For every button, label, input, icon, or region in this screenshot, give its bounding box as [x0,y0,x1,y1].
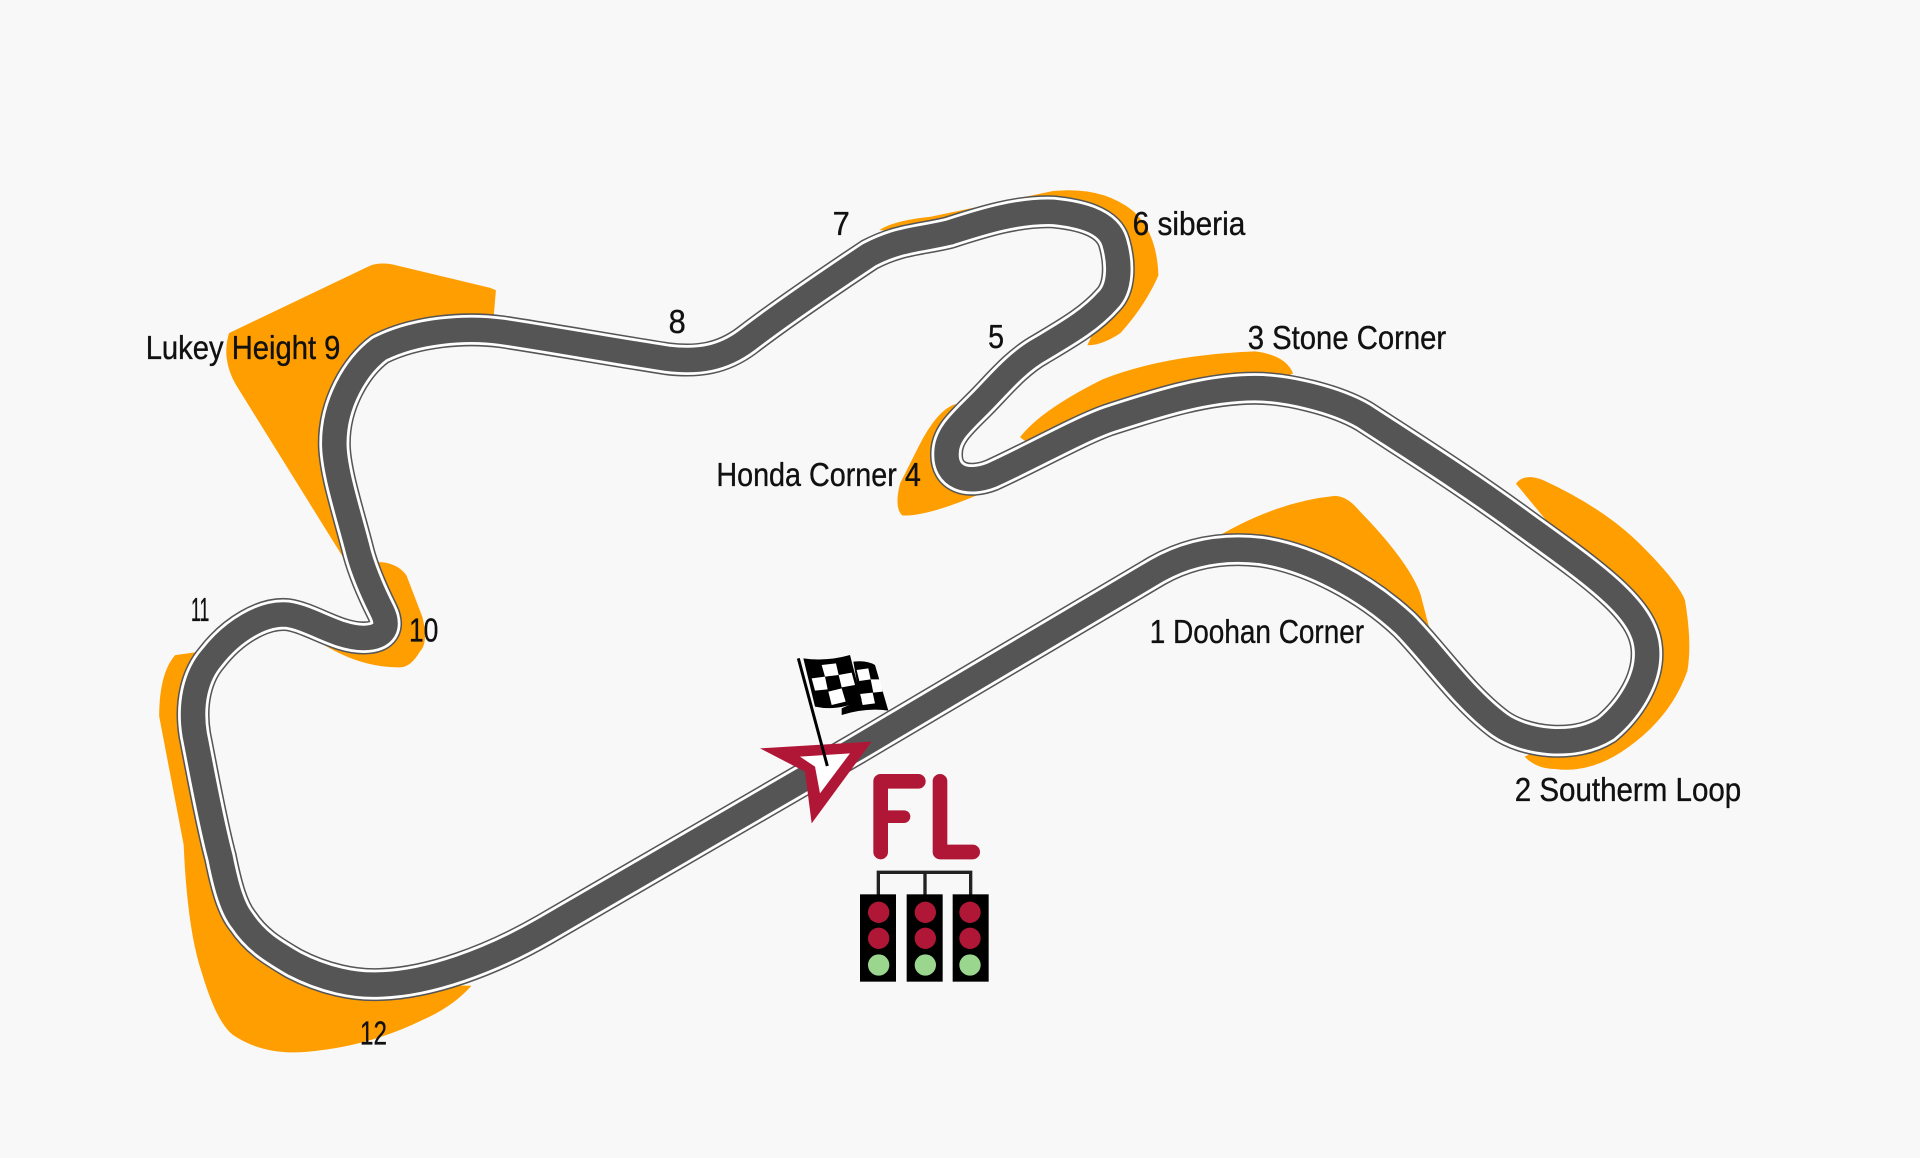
corner labels [146,206,1741,1052]
run-off: turns 11 and 12 [159,651,471,1052]
run-off: Honda Corner [897,404,998,516]
label: 11: 11 [191,592,209,629]
label: 12: 12 [360,1015,387,1052]
run-off: Southern Loop [1516,477,1689,770]
label: 3 Stone Corner: 3 Stone Corner [1248,320,1446,357]
label: Honda Corner 4: Honda Corner 4 [716,457,921,494]
icon: checkered flag [798,655,888,766]
label: 6 siberia: 6 siberia [1133,206,1246,243]
track [193,212,1647,985]
label: 8: 8 [669,304,686,341]
run-off: Lukey Height [226,264,496,561]
label: Lukey Height 9: Lukey Height 9 [146,330,340,367]
start and logo group [760,655,989,982]
label: 2 Southerm Loop: 2 Southerm Loop [1515,772,1741,809]
label: 10: 10 [409,613,438,650]
icon: location arrow [760,742,872,823]
logo: FL [881,781,973,852]
label: 1 Doohan Corner: 1 Doohan Corner [1150,614,1364,651]
run-off areas [159,190,1689,1052]
run-off: turn 10 [324,562,425,667]
label: 7: 7 [833,206,850,243]
icon: starting lights [860,872,989,982]
circuit layout [146,190,1741,1052]
run-off: Siberia [879,190,1158,345]
run-off: Doohan Corner [1210,496,1429,627]
run-off: Stone Corner [1020,351,1293,453]
label: 5: 5 [988,319,1004,356]
